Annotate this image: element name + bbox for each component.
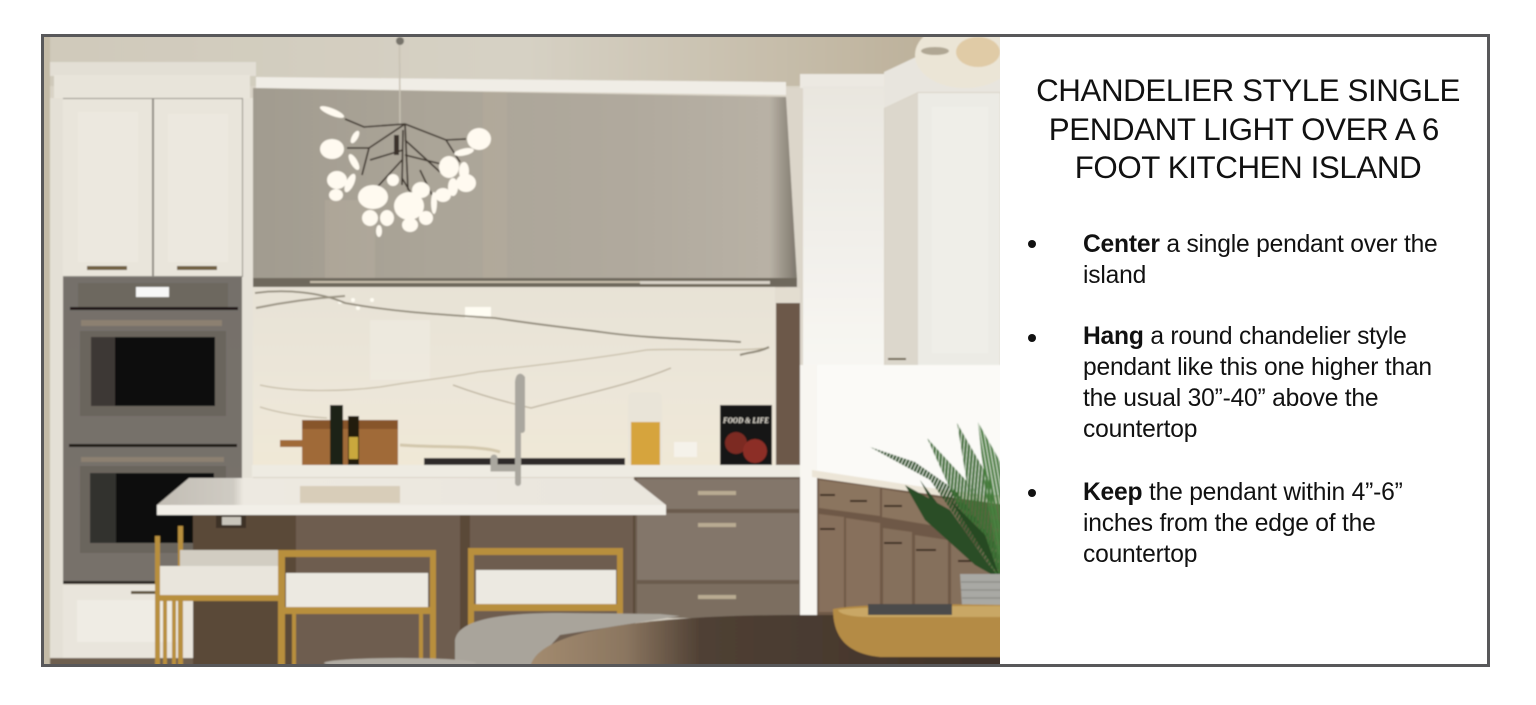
counter items: FOOD & LIFE <box>722 415 769 425</box>
bullet: center: island <box>1083 262 1146 289</box>
bullet: keep: countertop <box>1083 541 1197 568</box>
faucet <box>494 377 522 483</box>
title: PENDANT LIGHT OVER A 6 <box>1049 112 1439 146</box>
title: FOOT KITCHEN ISLAND <box>1075 150 1421 185</box>
bullet: keep: Keep the pendant within 4”-6” <box>1083 479 1403 506</box>
ceiling and back wall <box>40 30 1005 670</box>
potted fern <box>870 422 1005 578</box>
steel range hood <box>253 88 797 287</box>
kitchen photo <box>44 37 1000 664</box>
bullet: center: Center a single pendant over the <box>1083 231 1438 258</box>
marble backsplash <box>253 287 775 467</box>
bullet marker 2 <box>1028 334 1036 342</box>
kitchen island <box>157 478 666 666</box>
right column and upper wall cabinet <box>786 56 1005 620</box>
bullet: keep: inches from the edge of the <box>1083 510 1376 537</box>
base cabinets <box>634 477 800 618</box>
rope pot <box>960 574 1005 622</box>
bullet: hang: the usual 30”-40” above the <box>1083 385 1378 412</box>
lower left drawer <box>50 585 200 666</box>
right base cabinets <box>812 470 1005 615</box>
bullet: hang: pendant like this one higher than <box>1083 354 1432 381</box>
bullet: hang: countertop <box>1083 416 1197 443</box>
bullet: hang <box>1083 323 1432 443</box>
chandelier globes <box>319 104 491 237</box>
bullet: center <box>1083 231 1438 289</box>
bullet marker 1 <box>1028 240 1036 248</box>
crown moulding <box>256 77 786 95</box>
glass chandelier corner <box>915 22 1015 88</box>
bullet: hang: Hang a round chandelier style <box>1083 323 1407 350</box>
dark tall panel by hood <box>775 288 800 467</box>
chandelier pendant light <box>345 37 466 195</box>
wooden tray <box>833 604 1005 657</box>
bar stools <box>155 526 623 666</box>
left tall cabinets <box>50 62 256 668</box>
counter items <box>280 392 772 467</box>
foreground chair and table <box>324 613 1005 668</box>
bullet marker 3 <box>1028 489 1036 497</box>
wall ovens <box>63 277 242 584</box>
bullet: keep <box>1083 479 1403 568</box>
back counter <box>252 465 800 477</box>
title: CHANDELIER STYLE SINGLE <box>1036 73 1460 108</box>
title <box>1036 73 1460 185</box>
